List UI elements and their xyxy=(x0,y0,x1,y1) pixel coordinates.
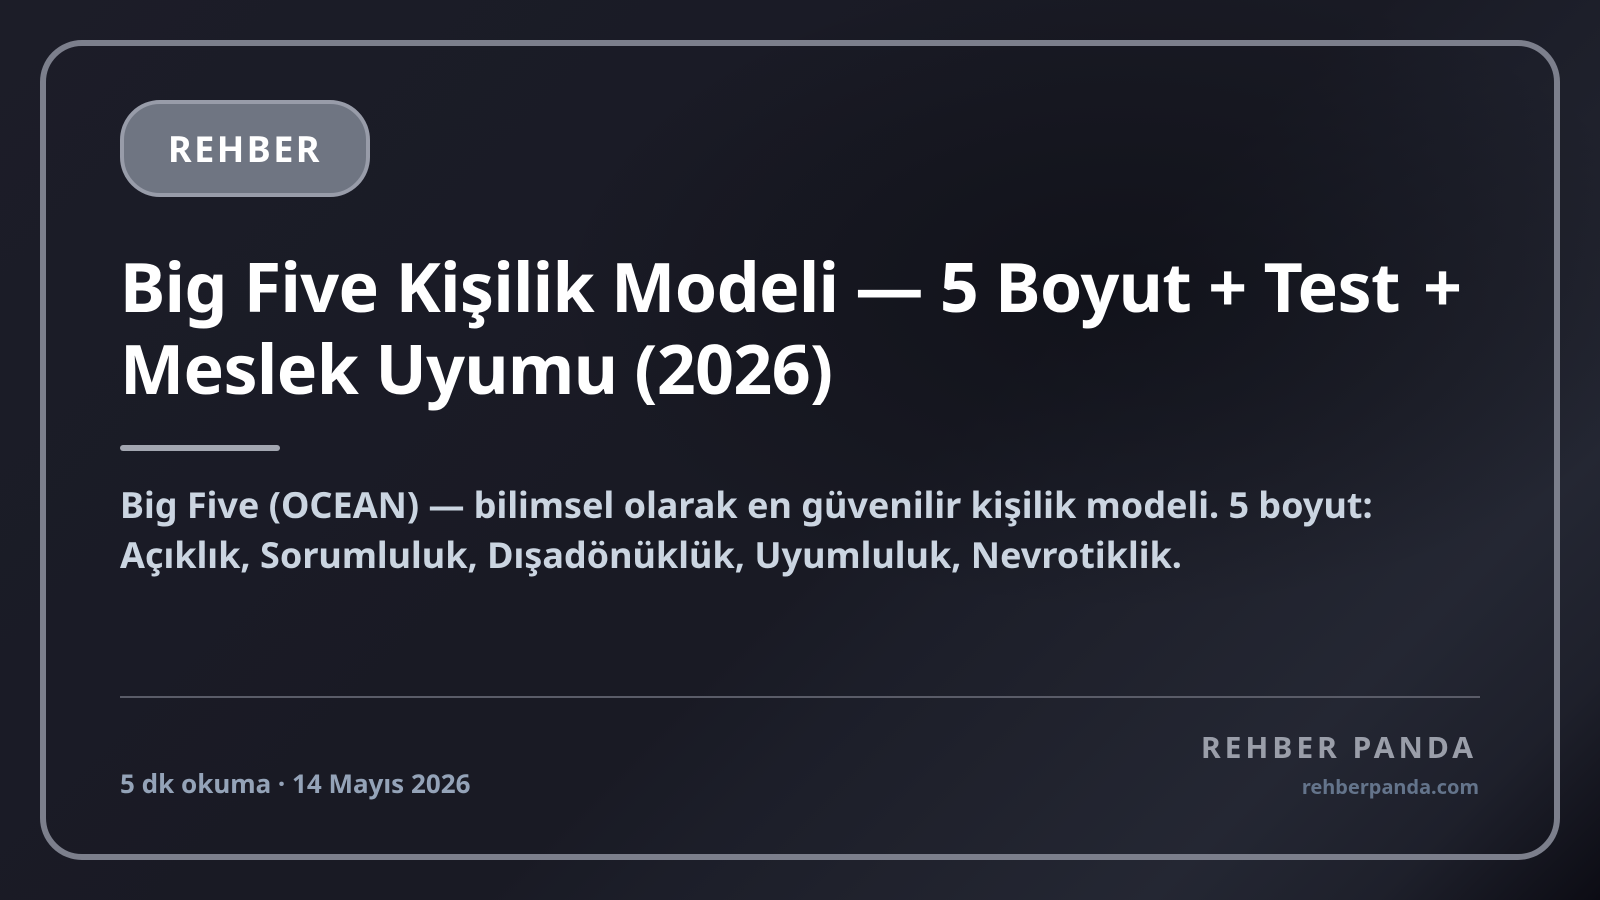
reading time and date: 5 dk okuma · 14 Mayıs 2026 xyxy=(120,765,470,801)
footer divider xyxy=(120,696,1480,698)
badge: REHBER xyxy=(120,100,370,197)
brand name: REHBER PANDA xyxy=(1201,726,1477,767)
badge: REHBER: REHBER xyxy=(168,124,322,173)
description: Big Five (OCEAN) — bilimsel olarak en güvenilir kişilik modeli. 5 boyut: xyxy=(120,480,1373,529)
title: Big Five Kişilik Modeli — 5 Boyut + Test + xyxy=(120,239,1461,332)
description: Açıklık, Sorumluluk, Dışadönüklük, Uyumluluk, Nevrotiklik. xyxy=(120,530,1182,579)
description xyxy=(120,480,1373,579)
website: rehberpanda.com xyxy=(1302,773,1479,800)
title: Meslek Uyumu (2026) xyxy=(120,321,832,414)
accent rule xyxy=(120,445,280,451)
title xyxy=(120,239,1461,414)
